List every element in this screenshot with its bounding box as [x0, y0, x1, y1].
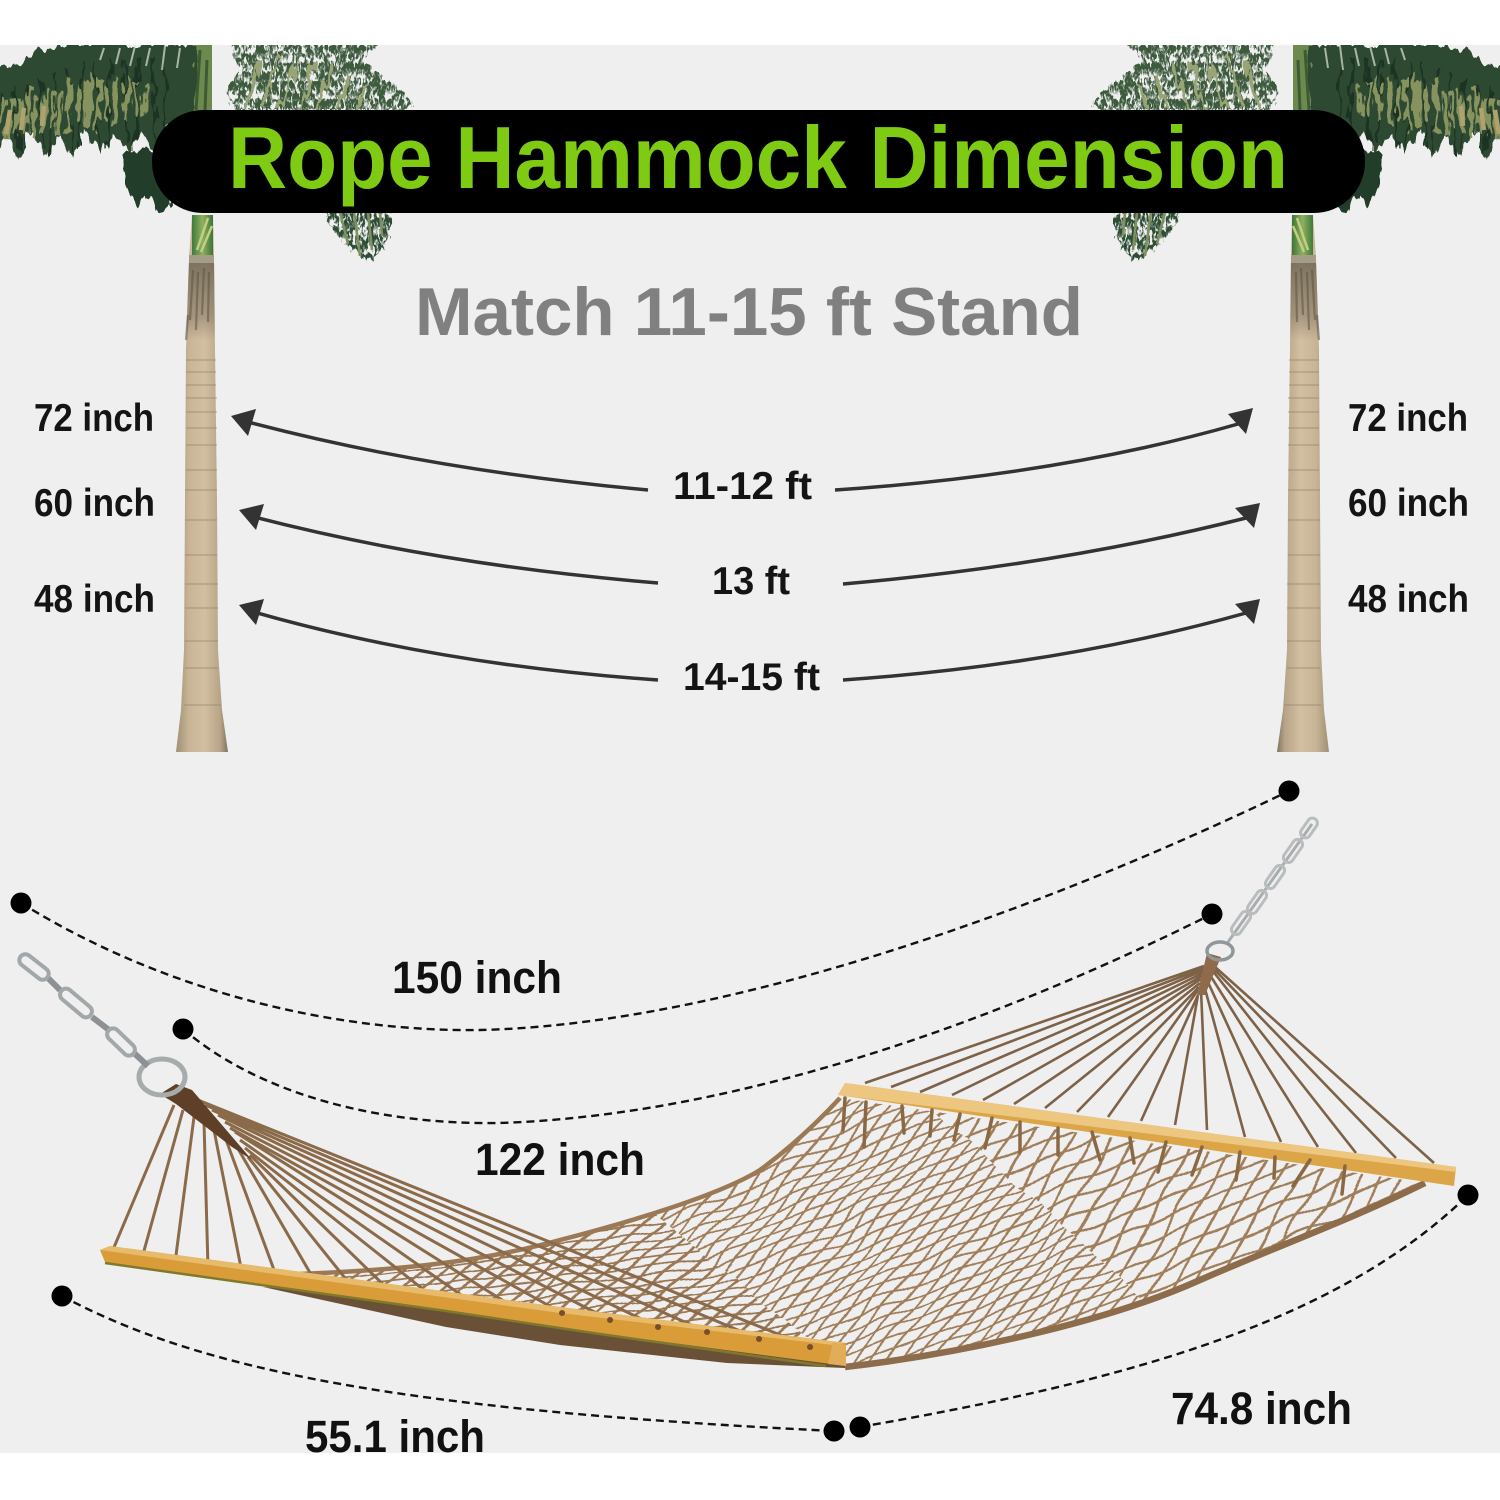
right height labels: 72 inch — [1348, 397, 1468, 440]
rope bundle: right — [1197, 953, 1221, 995]
left height labels: 48 inch — [34, 578, 155, 621]
arrow: 14-15 ft span — [239, 599, 1260, 680]
strings: left fan — [112, 1100, 810, 1347]
dimension line: 150 inch — [10, 780, 1300, 1030]
knot tails — [843, 1098, 1345, 1194]
label: 13 ft: 13 ft — [712, 560, 790, 603]
ring: right — [1207, 942, 1233, 960]
label: 150 inch: 150 inch — [392, 952, 562, 1003]
ring: left — [139, 1059, 185, 1095]
arrow: 11-12 ft span — [231, 408, 1253, 490]
chain: right — [1228, 816, 1319, 942]
left height labels — [34, 397, 155, 621]
dimension line: 74.8 inch — [850, 1184, 1478, 1438]
right height labels — [1348, 397, 1469, 621]
back spreader bar — [838, 1083, 1456, 1186]
left height labels: 72 inch — [34, 397, 154, 440]
net edges — [845, 1183, 1425, 1367]
label: 74.8 inch: 74.8 inch — [1171, 1383, 1352, 1434]
front spreader bar — [100, 1246, 846, 1366]
label: 122 inch: 122 inch — [475, 1134, 645, 1185]
net under the front bar — [263, 1287, 845, 1368]
dimension line: 55.1 inch — [52, 1286, 844, 1442]
strings: right fan — [865, 966, 1434, 1163]
label: 55.1 inch: 55.1 inch — [305, 1411, 485, 1462]
left height labels: 60 inch — [34, 482, 155, 525]
net — [334, 1098, 1420, 1363]
arrow: 13 ft span — [239, 503, 1260, 584]
palm tree: left — [0, 45, 415, 752]
right height labels: 48 inch — [1348, 578, 1469, 621]
label: 11-12 ft: 11-12 ft — [673, 465, 812, 508]
hammock — [17, 816, 1500, 1400]
palm tree: right — [1090, 45, 1500, 752]
title text: Rope Hammock Dimension — [228, 108, 1288, 207]
label: 14-15 ft: 14-15 ft — [683, 656, 820, 699]
rope bundle: left — [160, 1084, 252, 1160]
right height labels: 60 inch — [1348, 482, 1469, 525]
chain: left — [17, 952, 148, 1066]
bottom white strip — [0, 1453, 1500, 1500]
top white strip — [0, 0, 1500, 45]
title banner — [152, 108, 1365, 213]
subtitle: Match 11-15 ft Stand — [415, 274, 1083, 350]
dimension line: 122 inch — [172, 904, 1222, 1123]
